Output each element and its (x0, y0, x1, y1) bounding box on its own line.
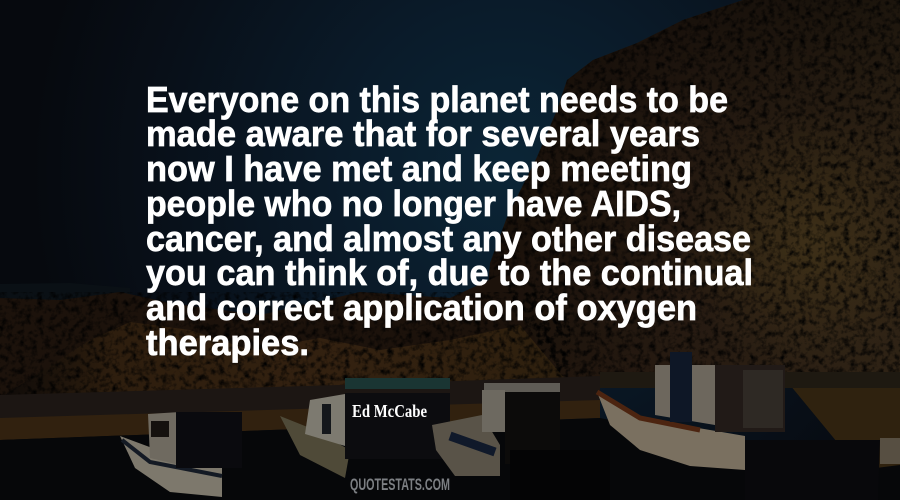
background: dark water (0, 418, 900, 500)
quote text (146, 79, 753, 363)
quote text: cancer, and almost any other disease (146, 218, 751, 259)
boat: third (432, 383, 610, 500)
background: cliff (480, 0, 900, 385)
quote text: now I have met and keep meeting (146, 148, 692, 189)
watermark: QUOTESTATS.COM (350, 475, 450, 494)
quote text: made aware that for several years (146, 113, 700, 154)
quote text: therapies. (146, 322, 309, 363)
quote text: people who no longer have AIDS, (146, 183, 681, 224)
background: distant hill and shore rocks (0, 275, 570, 398)
quote text: and correct application of oxygen (146, 287, 697, 328)
boat: right (597, 352, 900, 500)
quote text: Everyone on this planet needs to be (146, 79, 728, 120)
boat: second (280, 378, 450, 478)
quote text: you can think of, due to the continual (146, 252, 753, 293)
boat: left (120, 412, 242, 497)
background: quay wall and walkway (0, 372, 900, 470)
author signature: Ed McCabe (352, 401, 427, 421)
